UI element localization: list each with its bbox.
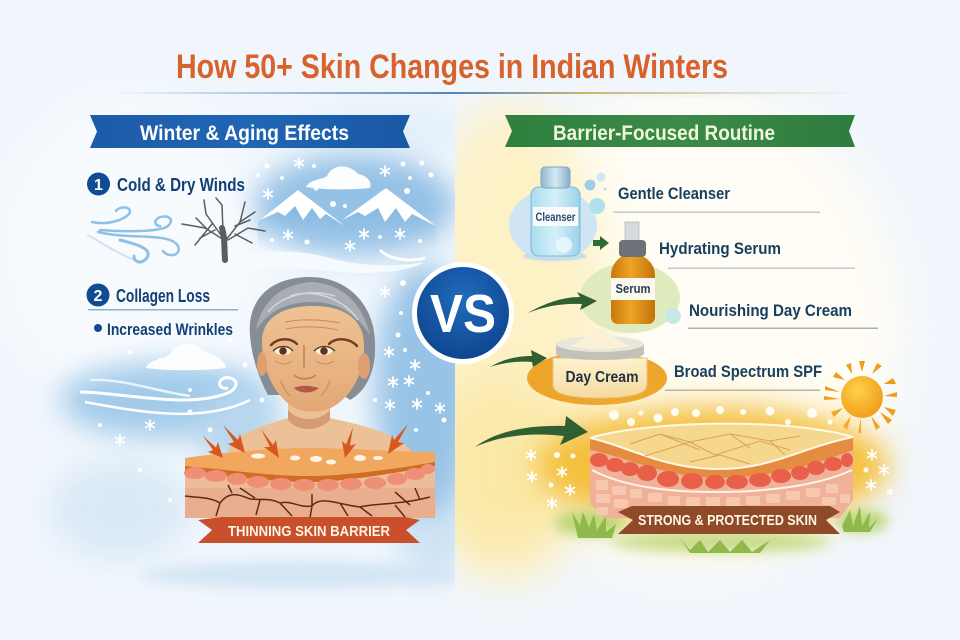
- surface pattern: [630, 434, 800, 464]
- vs badge: VS: [430, 284, 496, 344]
- item 1: cold and dry winds: [87, 172, 245, 196]
- winter backdrop: [60, 155, 475, 515]
- step: gentle cleanser: [509, 167, 820, 261]
- step: hydrating serum: Hydrating Serum: [659, 239, 781, 258]
- illustration: older woman: [184, 277, 436, 518]
- icon: cloud and wind: [80, 344, 250, 414]
- background: [0, 89, 926, 600]
- arrow: to day cream: [490, 350, 547, 367]
- step: gentle cleanser: Cleanser: [536, 210, 576, 224]
- step: hydrating serum: Serum: [616, 282, 650, 296]
- shoulders and neck: [228, 398, 412, 452]
- ribbon: strong and protected skin: STRONG & PROTECTED SKIN: [638, 512, 817, 529]
- arrow: to strong skin: [475, 416, 588, 447]
- heading ribbon: winter and aging effects: [90, 115, 410, 148]
- item 1: cold and dry winds: 1: [94, 177, 103, 194]
- icon: sun: [824, 361, 897, 433]
- pointing arrows: [203, 424, 408, 458]
- dermis bricks: [596, 480, 850, 515]
- item 2: collagen loss: [86, 284, 238, 339]
- step: gentle cleanser: Gentle Cleanser: [618, 184, 730, 203]
- title: How 50+ Skin Changes in Indian Winters: [176, 48, 728, 86]
- ribbon: thinning skin barrier: [198, 517, 420, 543]
- heading ribbon: winter and aging effects: Winter & Aging Effects: [140, 122, 349, 145]
- icon: bare tree: [182, 198, 265, 260]
- step: nourishing day cream: [527, 301, 878, 405]
- ribbon: thinning skin barrier: THINNING SKIN BARRIER: [228, 523, 390, 540]
- step: hydrating serum: [580, 222, 855, 333]
- arrow: serum to day cream: [528, 292, 597, 313]
- heading ribbon: barrier-focused routine: [505, 115, 855, 147]
- item 1: cold and dry winds: Cold & Dry Winds: [117, 175, 245, 195]
- step: broad spectrum spf: Broad Spectrum SPF: [674, 362, 822, 381]
- snowflakes: [98, 158, 446, 502]
- panel: winter and aging effects: [60, 115, 475, 543]
- vs badge: [412, 262, 514, 364]
- illustration: strong protected skin: [590, 423, 853, 518]
- item 2: collagen loss: 2: [94, 288, 103, 305]
- heading ribbon: barrier-focused routine: Barrier-Focused Routine: [553, 122, 775, 145]
- grass: [554, 506, 888, 553]
- facial features: [271, 339, 357, 346]
- step: nourishing day cream: Nourishing Day Cream: [689, 301, 852, 320]
- red cells: [590, 453, 853, 489]
- arrow: cleanser to serum: [593, 236, 609, 250]
- skin cracks: [185, 485, 430, 518]
- panel: barrier-focused routine: [475, 115, 897, 553]
- hair: [250, 277, 375, 400]
- face: [262, 306, 364, 412]
- icon: wind swirls: [88, 207, 179, 262]
- item 2: collagen loss: Collagen Loss: [116, 286, 210, 306]
- thinning skin layers: [185, 448, 436, 518]
- yellow glow: [527, 406, 893, 528]
- icon: mountains and cloud: [230, 166, 436, 273]
- step: nourishing day cream: Day Cream: [566, 369, 638, 386]
- item 2: collagen loss: Increased Wrinkles: [107, 320, 233, 339]
- ribbon: strong and protected skin: [618, 506, 840, 534]
